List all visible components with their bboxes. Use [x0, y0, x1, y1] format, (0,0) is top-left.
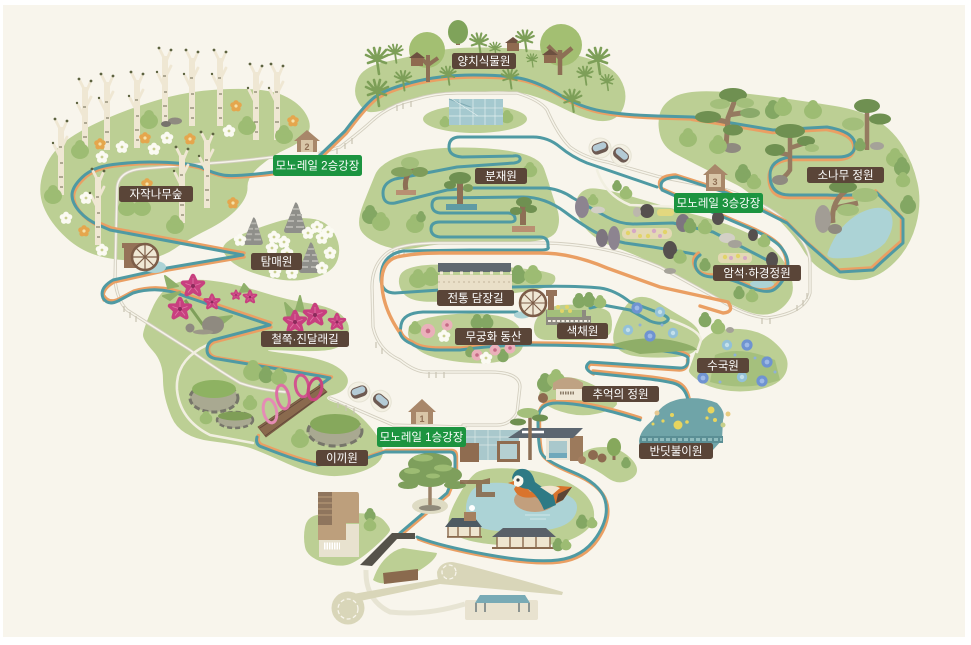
label: memory garden — [582, 386, 659, 402]
icon: water wheel centre — [514, 290, 557, 318]
panel: entrance lawn — [373, 548, 437, 584]
monorail route: teal ribbon — [72, 75, 903, 561]
icon: monorail station 3 house — [703, 164, 728, 191]
hydrangea flowers — [611, 302, 780, 387]
icon: monorail station 3 house: 3 — [712, 177, 718, 187]
panel: bonsai garden ground — [359, 147, 559, 249]
icon: monorail station 1 house — [408, 399, 436, 424]
panel: greenhouse ground — [423, 105, 527, 133]
label: fern garden: 양치식물원 — [458, 54, 510, 68]
label: birch forest: 자작나무숲 — [130, 188, 182, 201]
greenhouse — [440, 99, 513, 127]
icon: monorail station 1 house: 1 — [419, 414, 425, 424]
panel: hydrangea garden upper ground — [613, 297, 700, 358]
big zelkova tree — [398, 453, 466, 514]
icon: monorail station 2 house: 2 — [304, 142, 310, 152]
pond pavilions — [445, 478, 597, 551]
pine garden trees, bushes and rocks — [679, 88, 916, 234]
panel: lower left lawn — [304, 513, 390, 566]
panel: rose of sharon hill ground — [408, 314, 523, 363]
label: birch forest — [119, 186, 193, 202]
monorail cars upper right — [589, 138, 635, 170]
lower left building — [318, 492, 376, 557]
fern garden trees and fronds — [366, 20, 614, 112]
garden footpaths — [177, 170, 701, 443]
entrance road — [366, 570, 465, 613]
panel: memory garden ground — [539, 377, 617, 415]
parking lot roads — [332, 562, 563, 624]
pine garden pond — [827, 208, 893, 258]
panel: duck pond water — [466, 483, 577, 532]
panel: colour garden ground — [534, 305, 612, 340]
panel: stone wall path ground — [399, 264, 555, 302]
label: firefly garden: 반딧불이원 — [650, 444, 702, 458]
label: firefly garden — [639, 443, 713, 459]
birch trees — [52, 47, 284, 245]
panel: hydrangea garden lower ground — [689, 329, 788, 392]
panel: birch forest ground — [40, 89, 310, 260]
icon: mandarin duck — [508, 469, 572, 519]
monorail cars lower left — [348, 382, 395, 416]
label: bonsai garden — [475, 168, 527, 184]
panel: plum garden ground — [223, 218, 339, 280]
label: monorail station 2: 모노레일 2승강장 — [276, 158, 360, 172]
label: azalea path — [261, 331, 349, 347]
panel: pine garden ground — [658, 91, 919, 280]
panel: fern garden ground — [355, 47, 625, 121]
label: rock and water garden — [713, 265, 801, 281]
visitor center side trees and pots — [578, 438, 631, 468]
label: stone wall path — [437, 290, 514, 306]
rock garden stones and flower beds — [575, 180, 778, 302]
label: monorail station 2 — [273, 155, 362, 176]
label: monorail station 1: 모노레일 1승강장 — [380, 430, 464, 444]
label: pine garden — [807, 167, 884, 183]
label: plum garden — [251, 253, 302, 270]
moss gardens — [190, 360, 362, 448]
label: rose of sharon hill — [455, 328, 532, 345]
label: hydrangea garden — [697, 358, 749, 373]
label: hydrangea garden: 수국원 — [707, 358, 739, 372]
label: memory garden: 추억의 정원 — [592, 387, 649, 401]
icon: water wheel left — [122, 243, 166, 273]
centre pine — [510, 408, 548, 460]
roundabouts — [338, 565, 456, 619]
rose of sharon flowers — [409, 314, 516, 364]
label: moss garden — [316, 450, 368, 466]
entrance covered bridge — [360, 533, 415, 566]
track supports — [124, 101, 807, 414]
label: fern garden — [452, 53, 516, 69]
label: stone wall path: 전통 담장길 — [447, 292, 504, 305]
firefly dome — [639, 398, 730, 451]
label: moss garden: 이끼원 — [326, 451, 358, 465]
icon: monorail station 2 house — [294, 130, 320, 152]
colour garden terraces — [546, 292, 606, 325]
visitor center — [460, 428, 583, 462]
entrance deck — [383, 569, 418, 584]
label: azalea path: 철쭉·진달래길 — [271, 332, 339, 346]
panel: rock garden ground — [576, 188, 793, 315]
plum garden stone towers and blossoms — [234, 202, 336, 279]
label: monorail station 1 — [377, 427, 466, 447]
label: bonsai garden: 분재원 — [485, 169, 517, 183]
label: rock and water garden: 암석·하경정원 — [723, 266, 791, 280]
label: monorail station 3: 모노레일 3승강장 — [677, 196, 761, 210]
azalea flowers — [163, 276, 344, 334]
panel: azalea and moss garden ground — [143, 280, 383, 476]
label: plum garden: 탐매원 — [261, 254, 292, 268]
panel: duck pond lawn — [448, 468, 594, 546]
label: pine garden: 소나무 정원 — [817, 168, 874, 182]
label: rose of sharon hill: 무궁화 동산 — [465, 330, 522, 344]
birch forest flowers and bushes — [44, 100, 299, 256]
label: monorail station 3 — [674, 193, 763, 213]
monorail track — [115, 93, 810, 427]
pink heart arch bridge — [258, 374, 327, 437]
stone wall path — [409, 263, 542, 291]
label: colour garden — [557, 323, 608, 339]
label: colour garden: 색채원 — [567, 324, 598, 338]
bonsai trees and pots — [362, 157, 537, 233]
monorail route: teal bonsai serpentine — [381, 137, 767, 333]
monorail route: orange ribbon — [74, 77, 902, 563]
memory garden house — [537, 369, 584, 403]
panel: visitor center side lawn — [578, 447, 637, 482]
bus shelter — [465, 595, 538, 620]
